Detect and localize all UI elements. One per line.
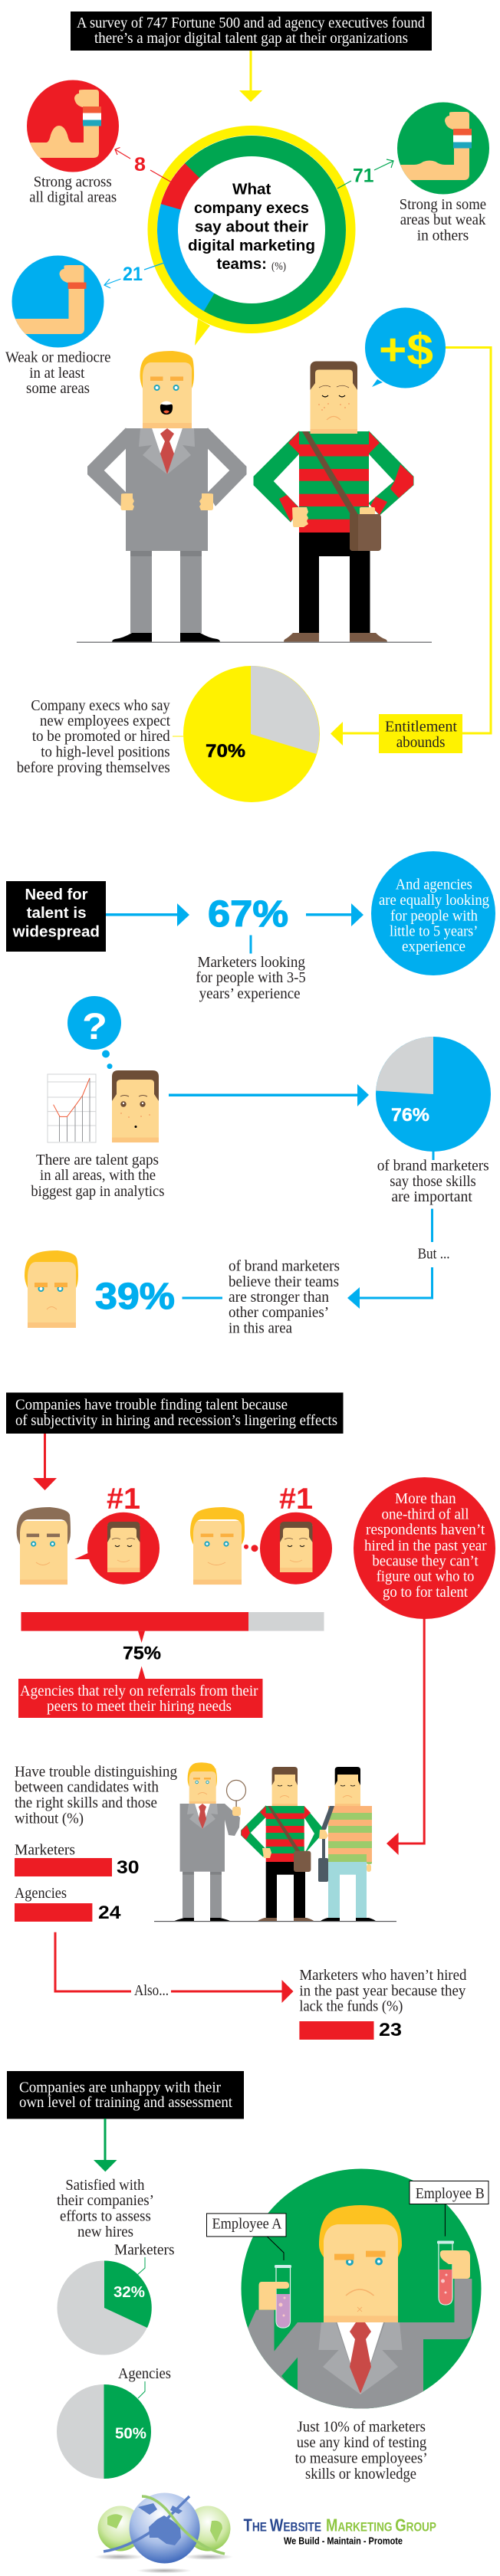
callout circle: haven't hired: respondents haven’t <box>366 1522 485 1539</box>
label: employee B <box>410 2181 488 2237</box>
callout: 21: 21 <box>123 264 143 285</box>
heading: unhappy with training: Companies are unhappy with their <box>19 2079 221 2096</box>
heading: unhappy with training: own level of training and assessment <box>19 2094 232 2111</box>
text: just 10 percent: use any kind of testing <box>297 2434 426 2451</box>
pie chart: marketers 32 <box>57 2241 175 2355</box>
label: weak or mediocre: some areas <box>26 380 90 397</box>
text: stronger than others: believe their teams <box>229 1273 339 1290</box>
head: analyst <box>112 1070 159 1142</box>
bar: agencies 24: 24 <box>98 1903 121 1923</box>
label: strong in some: areas but weak <box>400 211 485 228</box>
icon: medium arm (green) <box>397 103 489 195</box>
logo: wordmark <box>244 2515 436 2547</box>
label: employee B: Employee B <box>416 2185 485 2202</box>
donut chart: what execs say: digital marketing <box>188 238 315 254</box>
connector: also: Also... <box>134 1982 169 1999</box>
text: stronger than others: of brand marketers <box>229 1258 340 1275</box>
pie chart: 76 percent <box>376 1037 491 1160</box>
text: talent gaps: biggest gap in analytics <box>31 1183 165 1200</box>
connector: bubble to entitlement <box>446 348 491 733</box>
label: strong across: all digital areas <box>29 188 117 205</box>
arrow: title to ring <box>239 51 262 102</box>
text: just 10 percent <box>295 2419 428 2483</box>
thought bubble: question <box>67 996 121 1069</box>
callout circle: haven't hired: More than <box>395 1490 456 1507</box>
logo: wordmark: MARKETING GROUP <box>326 2515 436 2535</box>
text and bar: lack the funds: Marketers who haven’t hired <box>299 1967 466 1984</box>
label: employee A <box>207 2214 286 2260</box>
callout circle: haven't hired: hired in the past year <box>364 1537 487 1554</box>
text: company execs who say: before proving themselves <box>17 759 170 776</box>
pie chart: marketers 32: Marketers <box>114 2241 175 2258</box>
arrow: circle to trio <box>387 1618 424 1855</box>
callout circle: haven't hired: because they can’t <box>372 1552 479 1569</box>
callout: 71: 71 <box>353 166 374 187</box>
donut chart: what execs say: (%) <box>271 261 286 273</box>
label: strong in some: Strong in some <box>400 196 486 213</box>
text: just 10 percent: skills or knowledge <box>305 2466 416 2483</box>
head: peer two <box>190 1507 245 1585</box>
arrow: gaps to pie <box>169 1084 369 1106</box>
text: marketers looking: Marketers looking <box>198 954 305 971</box>
label: strong across: Strong across <box>34 173 112 190</box>
text: trouble distinguishing: between candidates with <box>15 1779 159 1796</box>
bar: agencies 24 <box>15 1885 121 1923</box>
text: company execs who say: Company execs who say <box>31 697 170 714</box>
heading: unhappy with training <box>7 2071 244 2119</box>
text: brand marketers important <box>377 1157 489 1205</box>
ground line two <box>154 1921 396 1922</box>
ground line <box>77 642 432 643</box>
head: blond marketer <box>25 1250 78 1328</box>
label: entitlement abounds: abounds <box>396 734 446 751</box>
group figure: casual employee <box>318 1767 377 1922</box>
group figure: sweater employee <box>242 1767 323 1922</box>
text and bar: lack the funds: 23 <box>379 2020 402 2040</box>
text: satisfied: Satisfied with <box>65 2177 144 2194</box>
text: stronger than others: other companies’ <box>229 1304 329 1321</box>
connector: but <box>347 1209 450 1309</box>
logo: wordmark: THE WEBSITE <box>244 2515 321 2535</box>
label: weak or mediocre: Weak or mediocre <box>5 349 111 366</box>
callout: agencies referrals: Agencies that rely on referrals from their <box>20 1683 258 1699</box>
label: #1 second: #1 <box>279 1483 313 1516</box>
speech bubble: number one <box>74 1512 160 1585</box>
callout circle: agencies: little to 5 years’ <box>390 923 478 940</box>
text: talent gaps <box>31 1152 165 1200</box>
connector: but: But ... <box>418 1246 450 1263</box>
arrow: heading to 67 <box>106 903 189 926</box>
arrow: red down <box>33 1434 57 1490</box>
text: stronger than others: in this area <box>229 1319 292 1336</box>
text: company execs who say: to be promoted or hired <box>32 728 170 745</box>
donut chart: what execs say: company execs <box>194 200 309 217</box>
donut chart: what execs say: What <box>232 181 271 198</box>
pie chart: 76 percent: 76% <box>391 1105 429 1126</box>
pie chart: agencies 50 <box>57 2365 171 2479</box>
text: trouble distinguishing: the right skills and those <box>15 1794 157 1811</box>
bar: marketers 30 <box>15 1842 140 1878</box>
callout: 8: 8 <box>134 154 146 175</box>
callout circle: agencies: for people with <box>390 907 478 924</box>
text: brand marketers important: are important <box>391 1188 472 1205</box>
heading: need for talent <box>6 881 106 952</box>
bar: agencies 24: Agencies <box>15 1885 67 1902</box>
stat: 75 percent: 75% <box>123 1644 161 1664</box>
label: weak or mediocre <box>5 349 111 397</box>
logo: globes <box>94 2493 233 2573</box>
text and bar: lack the funds <box>299 1967 466 2040</box>
text: stronger than others <box>229 1258 340 1336</box>
thought bubble: number one <box>244 1512 332 1585</box>
icon: weak arm (blue) <box>12 256 104 348</box>
heading: trouble finding talent <box>6 1393 344 1434</box>
figure: tester in green circle <box>230 2168 482 2422</box>
pie chart: agencies 50: 50% <box>115 2426 146 2443</box>
label: weak or mediocre: in at least <box>29 365 85 382</box>
stat: 67 percent: 67% <box>208 894 288 935</box>
text: trouble distinguishing <box>15 1763 177 1827</box>
pie chart: 70 percent <box>173 666 320 802</box>
text: marketers looking: years’ experience <box>199 985 301 1002</box>
figure: young employee <box>254 362 413 642</box>
text: satisfied: new hires <box>77 2224 133 2240</box>
stat: 39 percent: 39% <box>95 1277 175 1317</box>
text: just 10 percent: to measure employees’ <box>295 2450 428 2467</box>
arrow: entitlement to pie <box>331 722 379 746</box>
pie chart: marketers 32: 32% <box>113 2284 145 2301</box>
speech bubble: plus dollars <box>365 308 446 388</box>
text: company execs who say: new employees expect <box>40 713 170 729</box>
callout circle: haven't hired: figure out who to <box>377 1568 474 1585</box>
callout: agencies referrals <box>18 1666 262 1718</box>
group figure: exec with magnifier <box>173 1762 245 1922</box>
stat: 39 percent <box>95 1277 222 1317</box>
callout circle: haven't hired: one-third of all <box>382 1506 469 1522</box>
logo: wordmark: We Build - Maintain - Promote <box>284 2536 403 2547</box>
text: company execs who say <box>17 697 170 776</box>
progress bar: 75 percent <box>21 1612 324 1643</box>
donut chart: what execs say: say about their <box>195 219 308 236</box>
text: brand marketers important: of brand marketers <box>377 1157 489 1174</box>
title banner: A survey of 747 Fortune 500 and ad agency executives found <box>77 15 425 31</box>
line chart <box>48 1074 96 1142</box>
label: strong across <box>29 173 117 205</box>
connector: also <box>55 1932 293 2003</box>
arrow: 67 to circle <box>306 903 363 926</box>
label: entitlement abounds: Entitlement <box>385 719 457 736</box>
arrow: green down <box>94 2119 117 2171</box>
text: trouble distinguishing: Have trouble distinguishing <box>15 1763 177 1780</box>
text and bar: lack the funds: lack the funds (%) <box>299 1998 403 2015</box>
heading: need for talent: Need for <box>25 887 88 903</box>
text: satisfied: their companies’ <box>57 2192 154 2209</box>
text: satisfied <box>57 2177 154 2240</box>
title banner: there’s a major digital talent gap at their organizations <box>94 30 408 47</box>
callout: 8 <box>115 147 171 182</box>
heading: need for talent: widespread <box>12 924 100 941</box>
text: just 10 percent: Just 10% of marketers <box>298 2419 426 2436</box>
text: marketers looking <box>196 935 306 1002</box>
pie chart: 70 percent: 70% <box>206 741 245 762</box>
figure: executive <box>87 351 246 642</box>
heading: trouble finding talent: of subjectivity in hiring and recession’s lingering effects <box>15 1412 337 1429</box>
heading: trouble finding talent: Companies have trouble finding talent because <box>15 1397 288 1414</box>
speech bubble: plus dollars: +$ <box>379 325 433 375</box>
callout circle: agencies <box>371 851 495 975</box>
text: brand marketers important: say those skills <box>390 1173 476 1190</box>
callout: agencies referrals: peers to meet their hiring needs <box>47 1698 232 1715</box>
label: entitlement abounds <box>379 714 462 753</box>
heading: need for talent: talent is <box>27 905 87 922</box>
thought bubble: question: ? <box>82 1007 107 1047</box>
text: satisfied: efforts to assess <box>60 2208 151 2225</box>
text: talent gaps: There are talent gaps <box>36 1152 159 1168</box>
bar: marketers 30: Marketers <box>15 1842 75 1859</box>
callout circle: agencies: experience <box>402 939 465 955</box>
label: strong in some <box>400 196 486 244</box>
text: talent gaps: in all areas, with the <box>40 1167 156 1184</box>
callout: 71 <box>337 159 393 188</box>
label: #1: #1 <box>107 1483 140 1516</box>
donut chart: what execs say <box>133 111 370 349</box>
text: marketers looking: for people with 3-5 <box>196 969 306 986</box>
icon: strong arm (red) <box>27 80 119 172</box>
label: strong in some: in others <box>417 227 469 244</box>
callout: 21 <box>104 263 164 288</box>
head: peer one <box>17 1507 71 1585</box>
donut chart: what execs say: teams: <box>216 256 267 273</box>
callout circle: haven't hired <box>354 1477 495 1619</box>
label: employee A: Employee A <box>212 2216 282 2233</box>
text and bar: lack the funds: in the past year because they <box>299 1982 465 1999</box>
title banner <box>71 11 432 51</box>
text: company execs who say: to high-level positions <box>41 743 170 760</box>
callout circle: agencies: are equally looking <box>379 892 489 909</box>
bar: marketers 30: 30 <box>117 1857 140 1878</box>
callout circle: agencies: And agencies <box>396 877 472 893</box>
callout circle: haven't hired: go to for talent <box>383 1584 468 1601</box>
text: stronger than others: are stronger than <box>229 1289 329 1306</box>
pie chart: agencies 50: Agencies <box>118 2365 171 2382</box>
text: trouble distinguishing: without (%) <box>15 1810 84 1827</box>
